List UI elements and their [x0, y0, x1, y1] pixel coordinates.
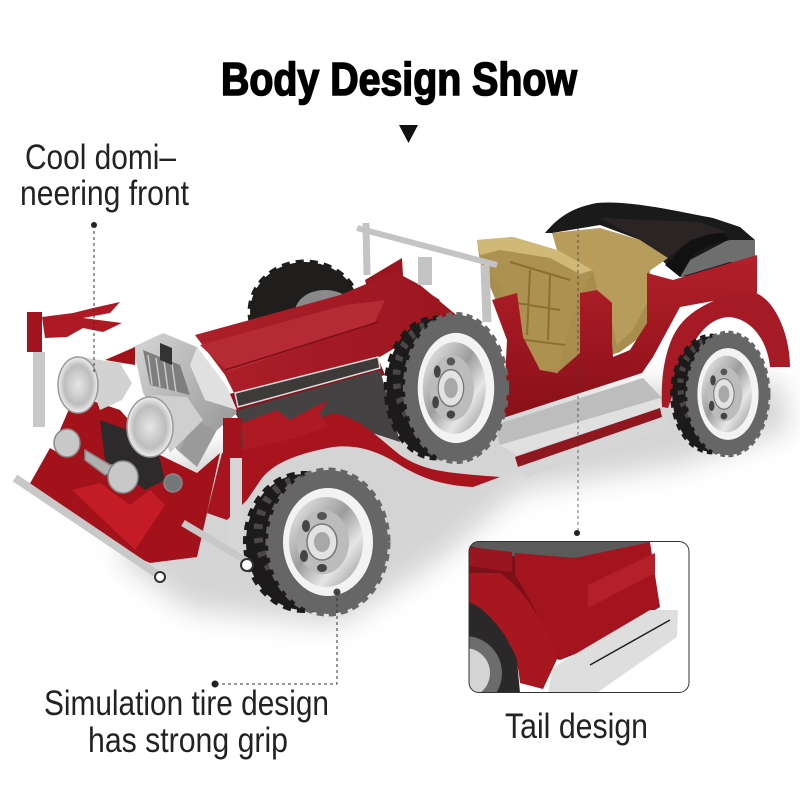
title: Body Design Show: [221, 53, 577, 105]
car illustration: [15, 203, 790, 625]
fender flag: [223, 400, 328, 558]
label: tire: Simulation tire design: [44, 684, 329, 723]
label: front: neering front: [20, 174, 189, 213]
spare wheel: [386, 315, 507, 461]
label: tire: [44, 684, 329, 760]
front fender: [207, 413, 500, 520]
small lights: [54, 429, 182, 493]
red flag: [27, 302, 122, 427]
label: tire: has strong grip: [88, 721, 288, 760]
callout line: tire: [212, 588, 340, 688]
hood: [195, 272, 440, 418]
far front wheel: [250, 262, 360, 362]
far fin: [365, 258, 460, 322]
callout line: tail: [574, 228, 580, 536]
callout line: front: [91, 222, 97, 372]
shadow: [120, 380, 790, 625]
rear fender: [662, 292, 790, 408]
front wheel: [246, 470, 388, 614]
front seat: [477, 237, 593, 372]
rear seat: [552, 228, 668, 345]
hood vent: [235, 357, 380, 407]
running boards: [495, 378, 668, 478]
inset: tail detail: [468, 541, 690, 693]
convertible top: [545, 203, 755, 277]
body side: [492, 255, 757, 418]
side fins: [238, 370, 400, 455]
icon: down triangle: [399, 125, 418, 143]
headlight right: [127, 395, 203, 457]
label: tail: Tail design: [505, 707, 648, 746]
seat backing: [480, 262, 650, 378]
headlight left: [58, 357, 132, 413]
front chassis: [28, 347, 220, 563]
label: front: Cool domi–: [25, 138, 176, 177]
label: front: [20, 138, 189, 213]
radiator grille: [133, 333, 237, 467]
rear wheel: [672, 333, 769, 455]
windshield: [357, 223, 497, 322]
bumper: [15, 478, 253, 582]
